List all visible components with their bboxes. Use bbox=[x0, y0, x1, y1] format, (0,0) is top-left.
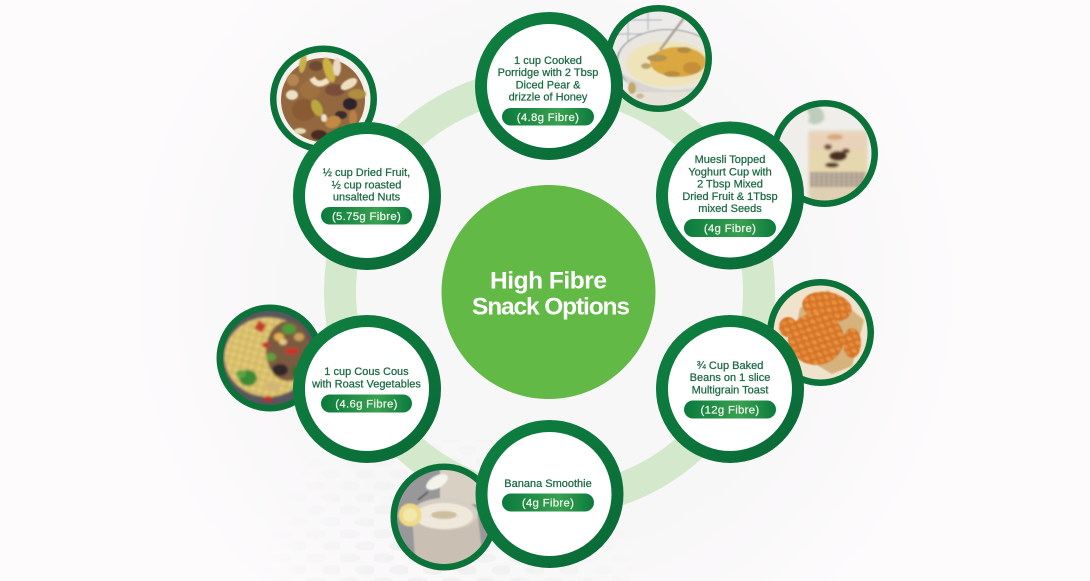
photo: nut bowl bbox=[270, 46, 377, 152]
title: High Fibre bbox=[490, 268, 607, 294]
fibre pill bbox=[502, 494, 594, 512]
fibre pill bbox=[321, 207, 412, 224]
fibre pill: (4g Fibre) bbox=[522, 498, 574, 510]
centre circle bbox=[442, 185, 656, 399]
fibre pill: (5.75g Fibre) bbox=[332, 211, 401, 223]
panel: porridge bbox=[481, 5, 720, 154]
label text: Multigrain Toast bbox=[692, 384, 768, 396]
label text: 1 cup Cous Cous bbox=[324, 366, 409, 378]
label text: Banana Smoothie bbox=[504, 478, 592, 490]
label text: 1 cup Cooked bbox=[514, 55, 582, 67]
label text: unsalted Nuts bbox=[333, 192, 401, 204]
label text: 2 Tbsp Mixed bbox=[697, 178, 763, 190]
fibre pill bbox=[321, 394, 412, 412]
fibre pill: (4g Fibre) bbox=[704, 223, 756, 235]
label text: with Roast Vegetables bbox=[311, 378, 421, 390]
photo: porridge bowl bbox=[605, 5, 720, 112]
label text: Porridge with 2 Tbsp bbox=[498, 67, 598, 79]
label text: ½ cup roasted bbox=[332, 179, 401, 191]
fibre pill bbox=[684, 219, 776, 237]
title: Snack Options bbox=[472, 294, 630, 320]
label text: Diced Pear & bbox=[516, 80, 581, 92]
fibre pill: (12g Fibre) bbox=[700, 404, 760, 416]
fibre pill bbox=[502, 108, 594, 126]
panel: dried fruit and nuts bbox=[270, 46, 435, 264]
photo: beans on toast bbox=[767, 279, 874, 386]
fibre pill: (4.8g Fibre) bbox=[517, 112, 579, 124]
connecting ring bbox=[340, 82, 759, 502]
label text: drizzle of Honey bbox=[509, 92, 588, 104]
panel: muesli yoghurt bbox=[662, 100, 878, 264]
photo: cous cous plate bbox=[216, 304, 324, 412]
label text: mixed Seeds bbox=[698, 203, 762, 215]
fibre pill bbox=[684, 400, 776, 418]
background bbox=[355, 440, 578, 581]
label text: Muesli Topped bbox=[695, 154, 765, 166]
panel: baked beans bbox=[662, 279, 874, 457]
photo: smoothie glass bbox=[390, 464, 500, 570]
label text: Yoghurt Cup with bbox=[688, 166, 772, 178]
label text: Beans on 1 slice bbox=[690, 372, 770, 384]
panel: cous cous bbox=[216, 304, 435, 457]
label text: ¾ Cup Baked bbox=[697, 360, 763, 372]
label text: ½ cup Dried Fruit, bbox=[323, 167, 410, 179]
photo: muesli cup bbox=[771, 100, 878, 208]
fibre pill: (4.6g Fibre) bbox=[335, 398, 398, 410]
panel: banana smoothie bbox=[390, 426, 618, 570]
label text: Dried Fruit & 1Tbsp bbox=[682, 191, 778, 203]
